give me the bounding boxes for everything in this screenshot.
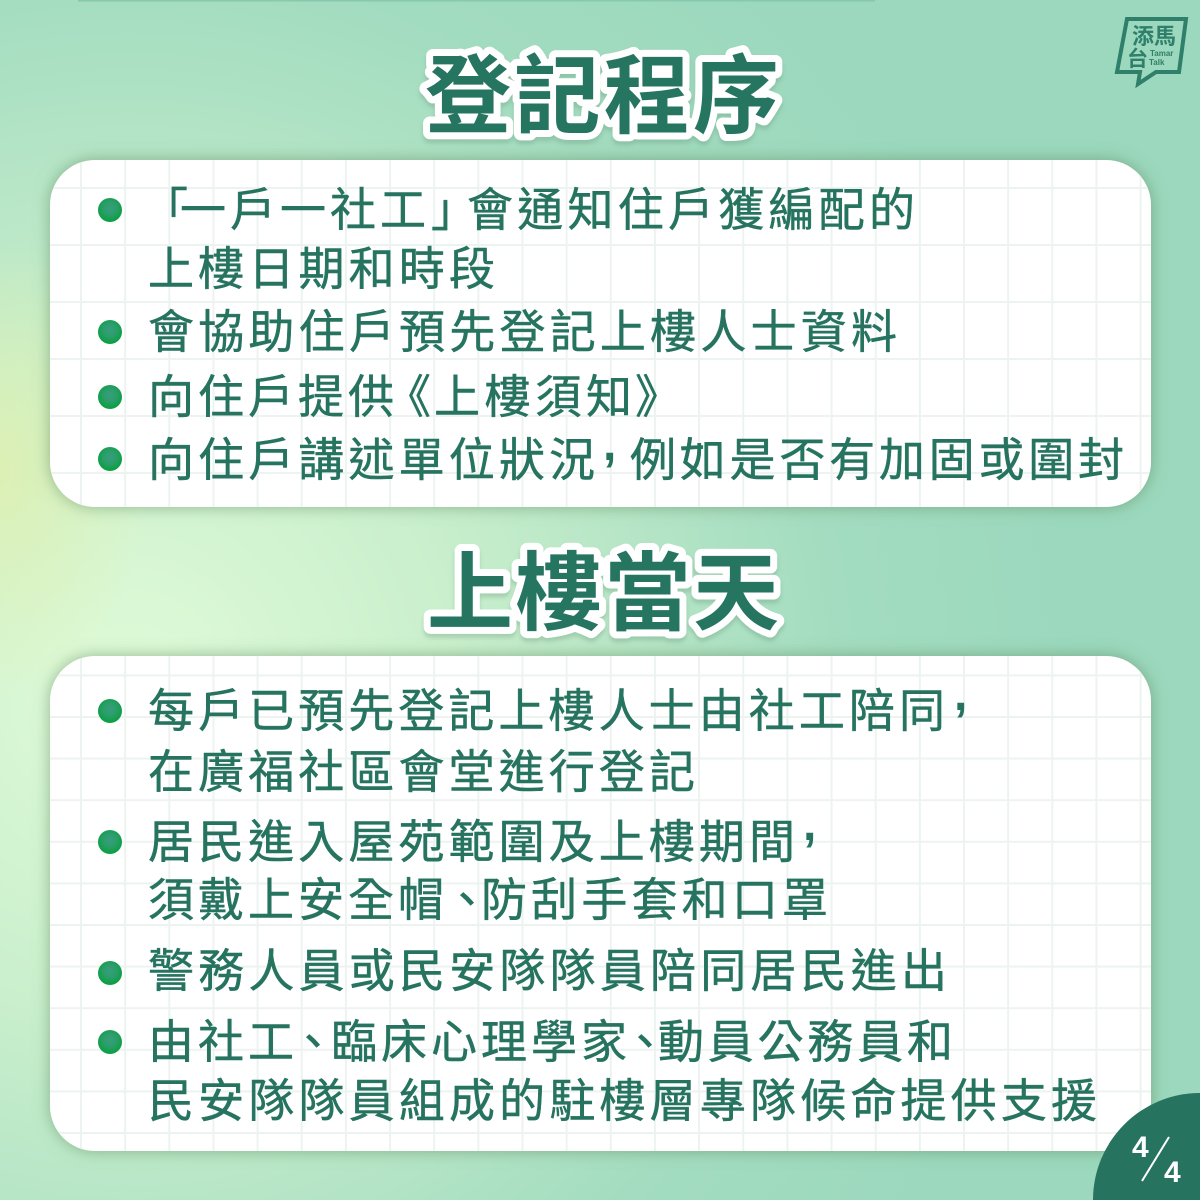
page number badge: 4: [1132, 1131, 1149, 1164]
item 3: [148, 361, 681, 427]
item 3: 上樓須知: [434, 361, 632, 427]
item 2: 會協助住戶預先登記上樓人士資料: [148, 296, 897, 362]
bullet 4: [98, 447, 122, 471]
item 4: 例如是否有加固或圍封: [630, 424, 1124, 490]
item 1 line 1: 每戶已預先登記上樓人士由社工陪同: [148, 675, 945, 741]
item 1 line 1: [142, 174, 915, 240]
page number badge: [1093, 1093, 1200, 1200]
logo: Tamar Talk speech bubble: 添馬: [1132, 19, 1176, 51]
bullet 3: [98, 961, 122, 985]
item 4 line 1: [148, 1006, 953, 1072]
bullet 1: [98, 699, 122, 723]
logo: Tamar Talk speech bubble: 台: [1127, 43, 1148, 73]
item 4 line 1: 、: [290, 1006, 336, 1072]
item 3: 警務人員或民安隊隊員陪同居民進出: [148, 935, 947, 1001]
item 4 line 1: 、: [622, 1006, 668, 1072]
logo: Tamar Talk speech bubble: Talk: [1149, 58, 1165, 67]
item 1 line 1: 一戶一社工: [180, 174, 426, 240]
item 1 line 1: 會通知住戶獲編配的: [467, 174, 915, 240]
item 1 line 2: 上樓日期和時段: [148, 233, 495, 299]
item 2 line 2: 須戴上安全帽: [148, 864, 444, 930]
bullet 4: [98, 1030, 122, 1054]
item 2 line 1: 居民進入屋苑範圍及上樓期間: [148, 806, 795, 872]
item 4 line 2: 民安隊隊員組成的駐樓層專隊候命提供支援: [148, 1065, 1097, 1131]
item 4: 向住戶講述單位狀況: [148, 424, 595, 490]
bullet 3: [98, 385, 122, 409]
title: on the day: 上樓當天: [427, 523, 779, 648]
item 2 line 2: [148, 864, 828, 930]
item 2 line 2: 、: [444, 864, 490, 930]
logo: Tamar Talk speech bubble: [1117, 19, 1186, 84]
item 4: ,: [603, 418, 616, 471]
page number badge: 4: [1164, 1156, 1181, 1189]
item 2 line 2: 防刮手套和口罩: [481, 864, 828, 930]
bullet 1: [98, 198, 122, 222]
item 1 line 1: 「: [142, 174, 188, 240]
item 1 line 2: 在廣福社區會堂進行登記: [148, 736, 695, 802]
item 4 line 1: 動員公務員和: [658, 1006, 953, 1072]
item 3: 》: [635, 361, 681, 427]
title: registration procedure: 登記程序: [425, 26, 779, 151]
item 1 line 1: 」: [431, 174, 477, 240]
bullet 2: [98, 320, 122, 344]
item 1 line 1: ,: [954, 668, 967, 721]
item 3: 《: [385, 361, 431, 427]
panel: on the day: [50, 656, 1151, 1151]
item 3: 向住戶提供: [148, 361, 394, 427]
item 4: [148, 418, 1124, 490]
item 2 line 1: ,: [803, 798, 816, 851]
item 4 line 1: 由社工: [148, 1006, 294, 1072]
logo: Tamar Talk speech bubble: Tamar: [1150, 49, 1173, 58]
item 4 line 1: 臨床心理學家: [331, 1006, 627, 1072]
panel: registration procedure: [50, 160, 1151, 507]
bullet 2: [98, 830, 122, 854]
